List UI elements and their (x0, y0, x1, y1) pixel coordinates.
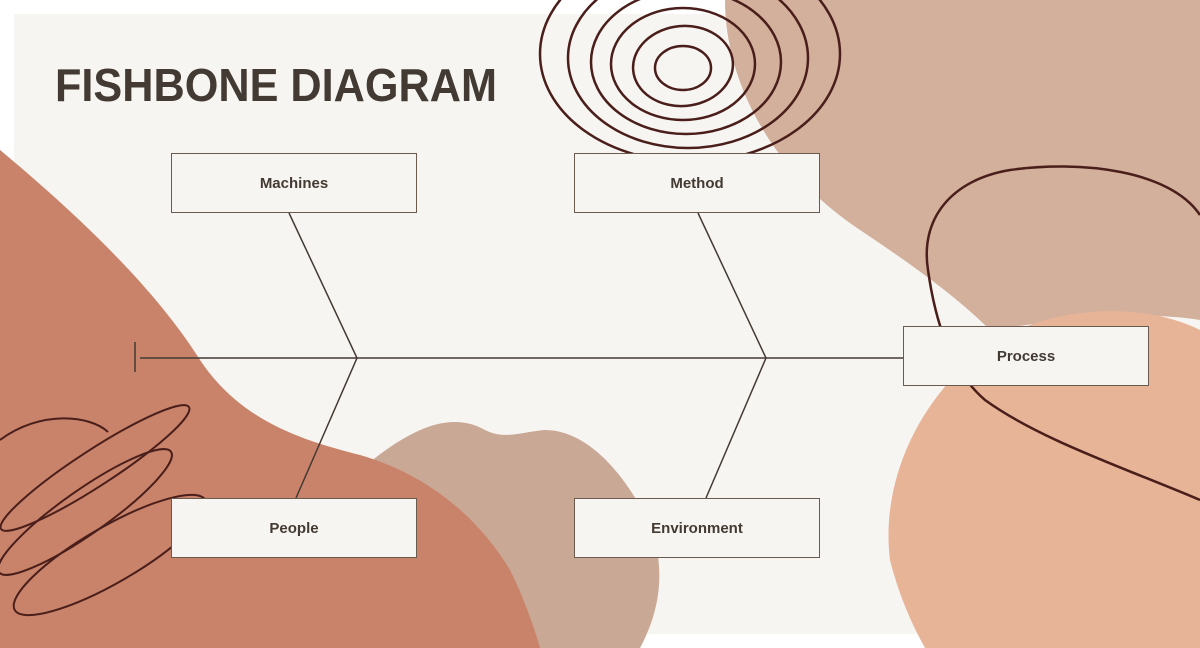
box: Process (903, 326, 1149, 386)
blob: terracotta left (0, 150, 540, 648)
box: Machines: Machines (260, 174, 328, 192)
blob: tan top right (725, 0, 1200, 330)
scribble bottom-left (0, 392, 219, 634)
box: Method: Method (670, 174, 724, 192)
box: Environment: Environment (651, 520, 743, 536)
decorative loop right (927, 166, 1200, 500)
fishbone lines (135, 213, 903, 498)
box: People (171, 498, 417, 558)
box: People: People (269, 520, 319, 536)
box: Environment (574, 498, 820, 558)
box: Method (574, 153, 820, 213)
box: Process: Process (997, 348, 1055, 364)
blob: peach right (888, 311, 1200, 648)
box: Machines (171, 153, 417, 213)
title: FISHBONE DIAGRAM (55, 59, 497, 111)
blob: beige middle (370, 422, 659, 648)
concentric rings (540, 0, 840, 162)
